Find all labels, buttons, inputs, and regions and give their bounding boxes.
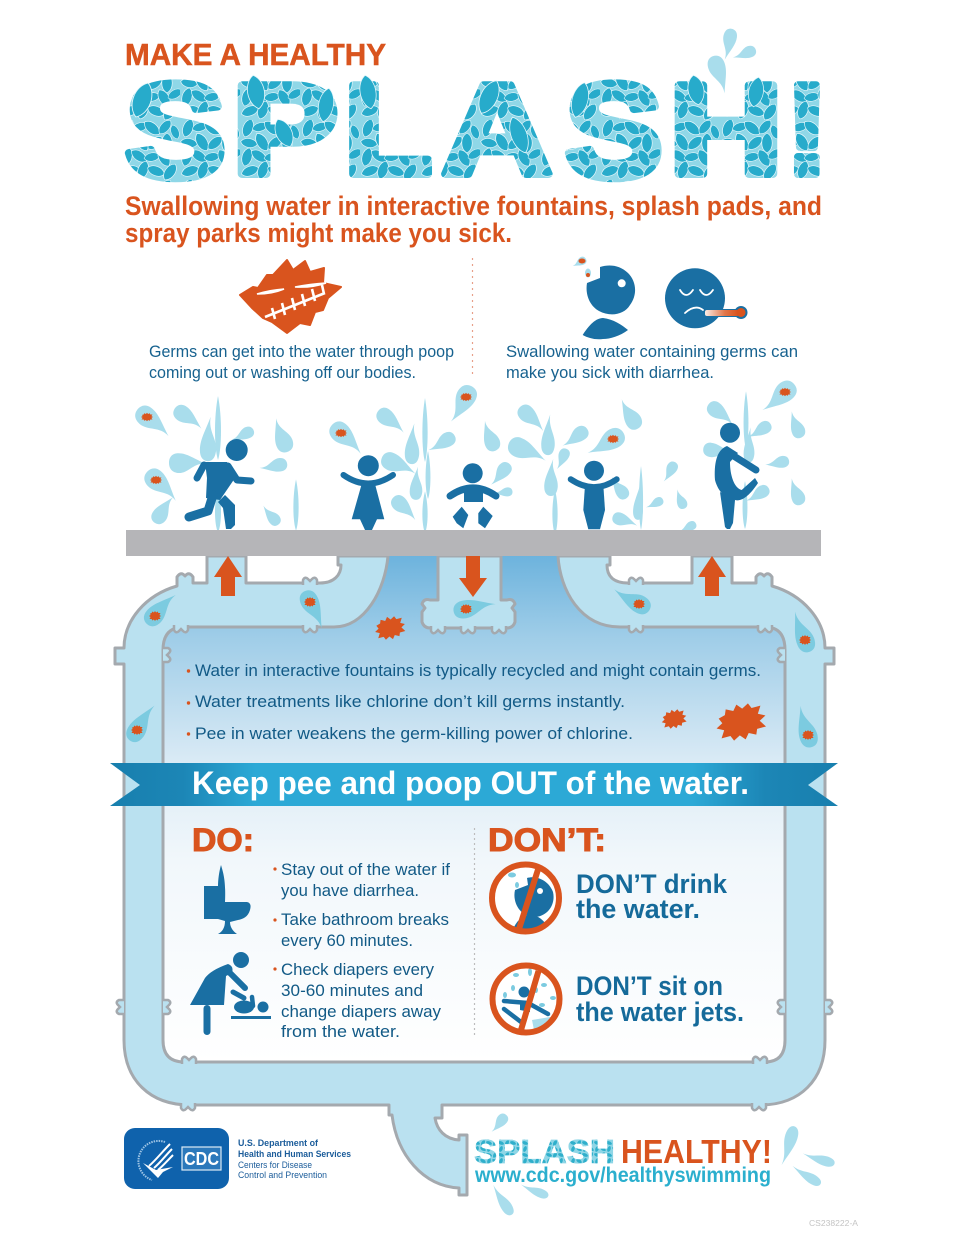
title: SPLASH mosaic lettering: S: [565, 57, 663, 206]
do list: you have diarrhea.: [281, 881, 419, 900]
icon: parent changing diaper: [190, 952, 271, 1035]
facts list: Water treatments like chlorine don’t kill germs instantly.: [195, 692, 625, 711]
text: splash healthy: HEALTHY!: [621, 1133, 772, 1170]
title: SPLASH mosaic lettering: P: [232, 58, 338, 202]
pipes: inner water area: [163, 556, 785, 1062]
arrow: up right: [698, 556, 726, 596]
figure: girl: [344, 455, 393, 530]
figure: child with arms out: [571, 461, 617, 529]
text: swallowing germs: make you sick with diarrhea.: [506, 364, 714, 382]
text: swallowing germs: [506, 343, 798, 382]
icon: no sitting on jets: [492, 966, 560, 1032]
title: SPLASH mosaic lettering: S: [125, 57, 226, 206]
fountain water drops: [149, 391, 808, 536]
text: germs get in: coming out or washing off our bodies.: [149, 364, 416, 382]
logo: HHS CDC: CDC: [184, 1149, 219, 1169]
text: HHS: [238, 1138, 351, 1180]
heading: DO: DO:: [192, 822, 254, 858]
do list: Stay out of the water if: [281, 860, 450, 879]
text: don't drink: DON’T drink: [576, 869, 728, 899]
do list: Check diapers every: [281, 960, 434, 979]
divider: [472, 258, 474, 376]
title: SPLASH mosaic lettering: !: [786, 58, 828, 202]
figure: person holding pee: [715, 423, 758, 529]
text: splash healthy: [474, 1133, 772, 1170]
text: don't drink: [576, 869, 728, 924]
do list: change diapers away: [281, 1002, 441, 1021]
banner: [110, 763, 838, 806]
germ drops in pipes: [123, 584, 821, 750]
text: germs get in: [149, 343, 454, 382]
arrow: down centre: [459, 556, 487, 597]
text: swallowing germs: Swallowing water containing germs can: [506, 343, 798, 361]
icon: large germ: [240, 260, 341, 333]
text: HHS: Health and Human Services: [238, 1149, 351, 1159]
facts list: [187, 661, 761, 743]
title: big leaves in lettering: [127, 74, 766, 156]
title: SPLASH mosaic lettering: L: [344, 58, 432, 202]
text: don't sit: DON’T sit on: [576, 971, 723, 1001]
text: splash healthy: SPLASH: [474, 1133, 615, 1170]
pipes: main outline: [115, 556, 834, 1195]
figure: baby: [450, 463, 496, 528]
text: HHS: Control and Prevention: [238, 1170, 327, 1180]
title: SPLASH mosaic lettering: A: [442, 58, 552, 202]
heading: DON'T: DON’T:: [488, 822, 606, 858]
divider: [474, 828, 476, 1036]
icon: sick face with thermometer: [665, 268, 748, 328]
arrow: up left: [214, 556, 242, 596]
do list: 30-60 minutes and: [281, 981, 423, 1000]
title: make a healthy: MAKE A HEALTHY: [125, 37, 386, 72]
loose germs: [372, 613, 770, 746]
germ drops in fountain: [131, 376, 801, 506]
icon: splash drops above title: [705, 28, 758, 96]
icon: toilet: [204, 865, 251, 934]
text: don't sit: [576, 971, 744, 1027]
footer splash drops: [487, 1111, 836, 1218]
subtitle: Swallowing water in interactive fountains, splash pads, and: [125, 191, 822, 221]
do list: [273, 860, 450, 1041]
text: HHS: Centers for Disease: [238, 1160, 312, 1170]
title: SPLASH mosaic lettering: [125, 57, 828, 206]
figure: running child: [189, 439, 251, 529]
text: germs get in: Germs can get into the water through poop: [149, 343, 454, 361]
do list: Take bathroom breaks: [281, 910, 449, 929]
icon: no drinking: [492, 864, 559, 932]
subtitle: [125, 191, 822, 248]
do list: from the water.: [281, 1022, 400, 1041]
icon: person swallowing water: [571, 255, 635, 339]
subtitle: spray parks might make you sick.: [125, 218, 512, 248]
facts list: Water in interactive fountains is typically recycled and might contain germs.: [195, 661, 761, 680]
do list: every 60 minutes.: [281, 931, 413, 950]
platform bar: [126, 530, 821, 556]
text: publication code: CS238222-A: [809, 1219, 859, 1228]
text: don't sit: the water jets.: [576, 997, 744, 1027]
text: HHS: U.S. Department of: [238, 1138, 318, 1148]
facts list: Pee in water weakens the germ-killing power of chlorine.: [195, 724, 633, 743]
text: website: www.cdc.gov/healthyswimming: [474, 1164, 771, 1187]
text: don't drink: the water.: [576, 894, 700, 924]
title: SPLASH mosaic lettering: H: [669, 58, 783, 202]
banner: Keep pee and poop OUT of the water.: [192, 765, 749, 801]
logo: HHS CDC: [124, 1128, 229, 1189]
